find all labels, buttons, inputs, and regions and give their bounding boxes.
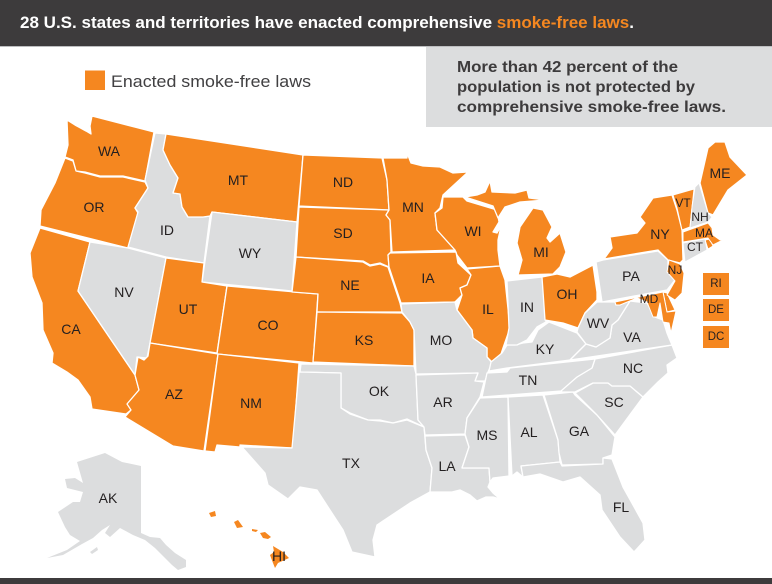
state: Kansas bbox=[313, 312, 414, 366]
state: North Dakota: ND bbox=[333, 174, 353, 190]
state: Oklahoma bbox=[300, 364, 424, 427]
state: Texas bbox=[242, 372, 432, 557]
state: Illinois bbox=[457, 266, 510, 362]
box: Rhode Island bbox=[703, 273, 729, 295]
state: Ohio: OH bbox=[556, 286, 578, 302]
state: Arizona bbox=[125, 343, 218, 451]
state: Minnesota: MN bbox=[402, 199, 424, 215]
state: Connecticut: CT bbox=[687, 240, 704, 254]
state: Illinois: IL bbox=[482, 301, 494, 317]
state: New Mexico bbox=[205, 354, 299, 452]
state: Ohio bbox=[542, 265, 597, 328]
state: Maryland bbox=[615, 292, 676, 333]
state: Arizona: AZ bbox=[165, 386, 183, 402]
state: Hawaii: HI bbox=[272, 548, 286, 564]
state: Indiana bbox=[506, 277, 546, 345]
state: Minnesota bbox=[383, 153, 468, 252]
state: Utah: UT bbox=[179, 301, 198, 317]
state: Wyoming: WY bbox=[239, 245, 262, 261]
state: Utah bbox=[150, 258, 227, 353]
state: Montana bbox=[163, 134, 303, 222]
state: Florida: FL bbox=[613, 499, 629, 515]
state: Delaware bbox=[663, 292, 675, 312]
state: Idaho bbox=[128, 133, 210, 263]
state: Louisiana: LA bbox=[438, 458, 456, 474]
state: Nebraska: NE bbox=[340, 277, 360, 293]
state: Nebraska bbox=[292, 257, 402, 312]
state: South Dakota: SD bbox=[333, 225, 353, 241]
box: Delaware bbox=[703, 299, 729, 321]
state: Kentucky: KY bbox=[536, 341, 555, 357]
state: Florida bbox=[521, 458, 645, 552]
state: Oregon bbox=[40, 158, 148, 248]
state: Nevada bbox=[78, 242, 166, 375]
state: Montana: MT bbox=[228, 172, 249, 188]
state: Mississippi: MS bbox=[476, 427, 498, 443]
state: North Carolina: NC bbox=[623, 360, 643, 376]
state: Missouri: MO bbox=[430, 332, 452, 348]
state: Pennsylvania: PA bbox=[622, 268, 640, 284]
state: Oregon: OR bbox=[84, 199, 104, 215]
state: Alabama bbox=[508, 395, 560, 477]
state: Vermont bbox=[673, 189, 694, 230]
state: Rhode Island bbox=[705, 239, 713, 249]
state: Maryland: MD bbox=[640, 292, 659, 306]
state: Pennsylvania bbox=[596, 251, 675, 302]
state: Michigan bbox=[465, 181, 566, 275]
state: Oklahoma: OK bbox=[369, 383, 390, 399]
state: Iowa: IA bbox=[421, 270, 435, 286]
box: District of Columbia bbox=[703, 326, 729, 348]
state: Missouri bbox=[401, 302, 492, 381]
state: Wyoming bbox=[202, 212, 297, 291]
callout: population not protected bbox=[426, 47, 772, 127]
box: Delaware: DE bbox=[708, 304, 724, 316]
state: West Virginia bbox=[577, 300, 630, 347]
state: North Dakota bbox=[299, 155, 389, 210]
state: New York: NY bbox=[650, 226, 670, 242]
state: Maine: ME bbox=[710, 165, 730, 181]
state: Louisiana bbox=[425, 435, 500, 501]
state: Michigan: MI bbox=[533, 244, 549, 260]
state: Maine bbox=[700, 142, 747, 215]
footer bar bbox=[0, 578, 772, 584]
state: New Hampshire bbox=[690, 183, 712, 228]
state: New Jersey bbox=[667, 260, 684, 300]
title banner: 28 U.S. states and territories have enacted comprehensive smoke-free laws. bbox=[20, 13, 634, 32]
legend: enacted smoke-free laws: Enacted smoke-free laws bbox=[111, 72, 311, 91]
state: New Mexico: NM bbox=[240, 395, 262, 411]
box: District of Columbia: DC bbox=[708, 331, 724, 343]
state: Arkansas: AR bbox=[433, 394, 453, 410]
state: Virginia: VA bbox=[623, 329, 641, 345]
state: Georgia bbox=[544, 392, 615, 465]
box: Rhode Island: RI bbox=[710, 278, 722, 290]
state: Indiana: IN bbox=[520, 299, 534, 315]
callout: population not protected: comprehensive smoke-free laws. bbox=[457, 99, 726, 116]
state: West Virginia: WV bbox=[587, 315, 610, 331]
state: Massachusetts bbox=[683, 223, 727, 245]
state: Tennessee bbox=[482, 359, 595, 397]
state: Hawaii bbox=[209, 511, 289, 568]
state: California bbox=[30, 228, 139, 414]
state: Washington: WA bbox=[98, 143, 121, 159]
map of U.S. states bbox=[30, 116, 747, 570]
state: Kansas: KS bbox=[355, 332, 373, 348]
state: South Dakota bbox=[296, 207, 391, 267]
state: Wisconsin: WI bbox=[464, 223, 482, 239]
state: New York bbox=[604, 195, 702, 268]
callout: population not protected: More than 42 percent of the bbox=[457, 59, 678, 76]
state: Washington bbox=[65, 116, 154, 181]
state: Connecticut bbox=[683, 239, 707, 262]
state: Alaska bbox=[47, 453, 186, 570]
state: Kentucky bbox=[489, 322, 586, 371]
state: Virginia bbox=[570, 301, 672, 360]
state: Tennessee: TN bbox=[519, 372, 537, 388]
state: New Jersey: NJ bbox=[668, 263, 682, 277]
state: Nevada: NV bbox=[114, 284, 134, 300]
state: Wisconsin bbox=[435, 197, 501, 268]
state: North Carolina bbox=[560, 345, 677, 397]
state: South Carolina bbox=[575, 383, 643, 435]
state: Alabama: AL bbox=[520, 424, 538, 440]
state: Arkansas bbox=[416, 373, 484, 435]
state: Colorado bbox=[217, 286, 318, 363]
state: South Carolina: SC bbox=[604, 394, 624, 410]
state: Georgia: GA bbox=[569, 423, 590, 439]
state: California: CA bbox=[61, 321, 81, 337]
state: Texas: TX bbox=[342, 455, 361, 471]
state: Iowa bbox=[388, 252, 471, 303]
state: Mississippi bbox=[462, 397, 509, 482]
title banner bbox=[0, 0, 772, 47]
state: New Hampshire: NH bbox=[691, 210, 709, 224]
state: Massachusetts: MA bbox=[695, 226, 713, 240]
state: Idaho: ID bbox=[160, 222, 174, 238]
callout: population not protected: population is not protected by bbox=[457, 79, 695, 96]
state: Colorado: CO bbox=[258, 317, 279, 333]
state: Alaska: AK bbox=[99, 490, 118, 506]
state: Vermont: VT bbox=[675, 196, 691, 210]
